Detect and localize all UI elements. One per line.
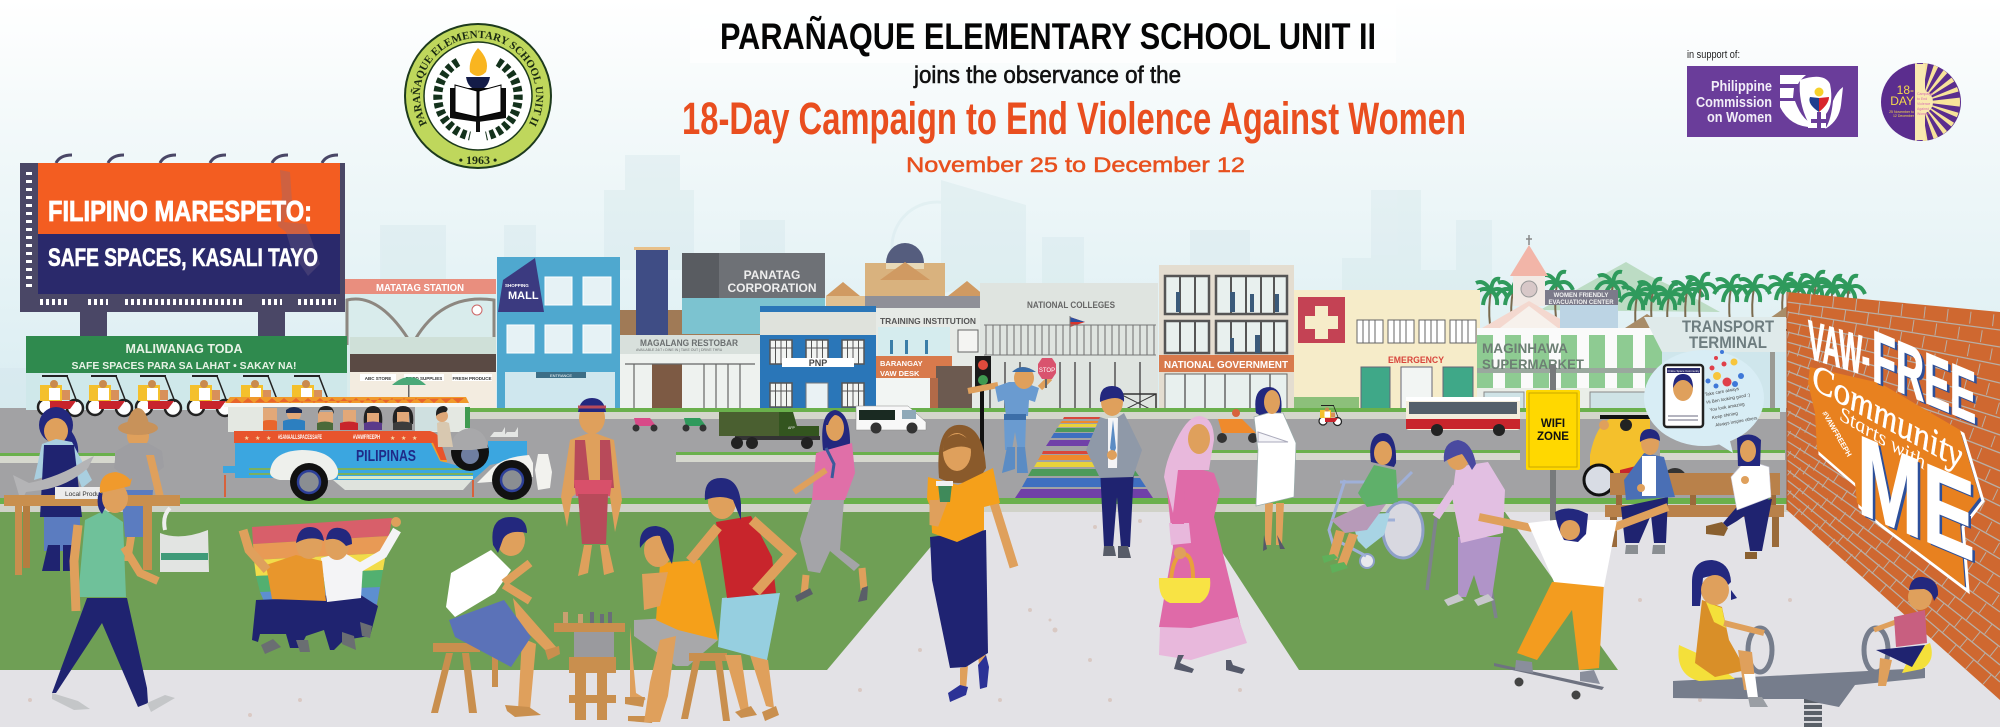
title: PARAÑAQUE ELEMENTARY SCHOOL UNIT II: [720, 15, 1376, 57]
building: shopping mall: SHOPPING: [505, 283, 529, 288]
building: Matatag station: FRESH PRODUCE: [452, 376, 492, 381]
building: Panatag Corporation: CORPORATION: [727, 281, 817, 295]
Maliwanag TODA terminal: MALIWANAG TODA: [125, 342, 243, 356]
building: national colleges: NATIONAL COLLEGES: [1027, 300, 1115, 311]
building: Magalang Restobar: AVAILABLE 24/7 • DINE IN | TAKE OUT | DRIVE THRU: [636, 348, 723, 352]
couple under rainbow flag: [243, 517, 401, 654]
person: woman in wheelchair: [1322, 433, 1423, 573]
building: women friendly evacuation center: EVACUATION CENTER: [1548, 300, 1614, 306]
person: man on bench using phone: [1621, 429, 1675, 554]
billboard: SAFE SPACES, KASALI TAYO: [48, 244, 318, 272]
building: hospital emergency: [1294, 290, 1480, 412]
mural: VAW-free community starts with me: Community: [1812, 354, 1963, 480]
18-day campaign logo: to End: [1917, 97, 1927, 101]
building: transport terminal: TRANSPORT: [1682, 318, 1774, 336]
mural: VAW-free community starts with me: Starts with: [1840, 402, 1925, 476]
campaign heading: 18-Day Campaign to End Violence Against Women: [682, 93, 1466, 144]
hills and palm trees: [1474, 262, 1865, 330]
building: women friendly evacuation center: [1545, 290, 1618, 333]
in support of label: in support of:: [1687, 49, 1740, 61]
jeepney: ★: [401, 435, 406, 442]
Maliwanag TODA terminal: SAFE SPACES PARA SA LAHAT • SAKAY NA!: [72, 360, 296, 372]
jeepney: #SANAALLSPACESSAFE: [278, 434, 322, 441]
person: doctor in white coat: [1254, 387, 1296, 551]
building: training institution and barangay VAW desk: BARANGAY: [880, 359, 923, 368]
road base: [0, 408, 2000, 508]
WiFi zone sign: ZONE: [1537, 431, 1569, 443]
vehicle: motorbikes: [632, 406, 1342, 443]
WiFi zone sign: WIFI: [1541, 418, 1565, 430]
building: national colleges: [980, 283, 1158, 412]
person: man in red tank top with stool: [681, 478, 790, 721]
road curbs and hedges: [0, 408, 1785, 463]
building: women friendly evacuation center: WOMEN FRIENDLY: [1554, 293, 1608, 299]
jeepney: ★: [390, 435, 395, 442]
18-day campaign logo: Violence: [1917, 102, 1930, 106]
18-day campaign logo: [1881, 63, 1961, 141]
mural: VAW-free community starts with me: [1808, 309, 1983, 591]
building: Panatag Corporation: [682, 253, 825, 334]
building: hospital emergency: EMERGENCY: [1388, 355, 1445, 366]
jeepney: PILIPINAS: [356, 448, 416, 465]
rainbow flag: [252, 518, 392, 625]
social media speech bubble: You look amazing: [1709, 401, 1745, 412]
18-day campaign logo: 25 November to: [1889, 110, 1914, 114]
left lawn: [0, 512, 960, 670]
mural: VAW-free community starts with me: #VAWFREEPH: [1820, 410, 1854, 458]
Philippine Commission on Women logo: [1687, 66, 1858, 137]
vehicle: army truck: [719, 412, 820, 449]
building: Panatag Corporation: PANATAG: [744, 268, 800, 282]
person: woman in hijab with yellow bag: [1159, 416, 1247, 674]
building: Maginhawa supermarket: MAGINHAWA: [1482, 340, 1568, 356]
person: traffic police officer with stop sign: [968, 358, 1056, 473]
seesaw with children: [1673, 560, 1938, 727]
person: chess player in white shirt: [431, 517, 560, 717]
vehicle: army truck: AFP: [788, 426, 795, 430]
billboard: FILIPINO MARESPETO:: [48, 196, 312, 228]
vehicle: red bus: [1406, 397, 1520, 436]
person: woman in pink blouse walking: [794, 410, 868, 602]
person: Igorot man in traditional dress: [561, 398, 622, 576]
jeepney: ★: [255, 435, 260, 442]
school seal logo: • 1963 •: [459, 153, 497, 167]
building: shopping mall: ENTRANCE: [550, 373, 572, 378]
18-day campaign logo: DAY: [1890, 94, 1914, 108]
curb: [0, 504, 2000, 512]
building: Matatag station: ABC STORE: [365, 376, 391, 381]
building: PNP: PNP: [809, 358, 827, 368]
market table with local products sign and bag: Local Products: [65, 491, 109, 498]
jeepney: ★: [266, 435, 271, 442]
building: domed heritage hall: [826, 243, 985, 314]
building: training institution and barangay VAW desk: TRAINING INSTITUTION: [880, 316, 976, 326]
person: chess player in orange tank top: [625, 526, 718, 723]
18-day campaign logo: Campaign: [1917, 92, 1933, 96]
building: Maginhawa supermarket: SUPERMARKET: [1482, 356, 1584, 372]
building: Matatag station: [345, 279, 496, 412]
bench: [1605, 473, 1784, 547]
pavement speckles: [28, 519, 1792, 717]
jeepney: #VAWFREEPH: [353, 434, 380, 441]
building: Magalang Restobar: [620, 247, 760, 412]
building: national government: [1159, 265, 1294, 412]
social media speech bubble: [1644, 350, 1764, 453]
subtitle line: joins the observance of the: [913, 62, 1181, 89]
building: church: [1482, 235, 1576, 328]
hedge along curb: [0, 498, 2000, 504]
18-day campaign logo: 12 December: [1893, 114, 1915, 118]
traffic light: [975, 356, 991, 460]
person: traffic police officer with stop sign: STOP: [1039, 368, 1055, 374]
billboard: [20, 155, 345, 338]
social media speech bubble: Online Space Community: [1668, 369, 1700, 373]
school seal logo: [404, 23, 552, 169]
campaign dates: November 25 to December 12: [906, 153, 1245, 177]
person: skateboarder: [1479, 507, 1668, 700]
building: shopping mall: [497, 257, 620, 412]
18-day campaign logo: 18-: [1897, 83, 1914, 97]
Maliwanag TODA terminal: [26, 336, 347, 416]
jeepney: ★: [412, 435, 417, 442]
mural: VAW-free community starts with me: ME: [1860, 415, 1978, 589]
faint city skyline: [0, 155, 1492, 408]
building: national government: NATIONAL GOVERNMENT: [1164, 360, 1288, 371]
18-day campaign logo: Against: [1917, 107, 1929, 111]
brick wall: [1787, 292, 2000, 700]
building: Matatag station: FOOD SUPPLIES: [406, 376, 442, 381]
person: woman on bench using phone: [1706, 434, 1772, 559]
social media speech bubble: Take care always: [1704, 386, 1740, 397]
person: main woman with coffee cup: [927, 425, 1014, 702]
school seal logo: PARAÑAQUE ELEMENTARY SCHOOL UNIT II: [410, 30, 544, 127]
social media speech bubble: Always inspire others: [1715, 415, 1758, 428]
mural: VAW-free community starts with me: ME: [1857, 412, 1975, 586]
pavement: [0, 512, 2000, 727]
social media speech bubble: Keep shining: [1712, 411, 1739, 420]
18-day campaign logo: Women: [1917, 112, 1929, 116]
building: transport terminal: [1644, 317, 1786, 412]
vehicle: police van: [856, 406, 926, 434]
person: walking man with hard hat: [52, 472, 175, 712]
Philippine Commission on Women logo: Philippine: [1711, 79, 1772, 95]
building: Matatag station: MATATAG STATION: [376, 282, 464, 294]
rainbow pedestrian crossing: [1013, 417, 1155, 501]
white title backing: [690, 0, 1396, 63]
WiFi zone sign: [1526, 365, 1580, 555]
building: training institution and barangay VAW desk: [876, 308, 980, 412]
right lawn: [1196, 512, 1618, 670]
building: transport terminal: TERMINAL: [1689, 334, 1767, 352]
person: elderly woman with walking canes: [1427, 440, 1505, 618]
mural: VAW-free community starts with me: VAW-: [1808, 309, 1870, 389]
building: training institution and barangay VAW desk: VAW DESK: [880, 369, 920, 378]
building: Magalang Restobar: MAGALANG RESTOBAR: [640, 338, 738, 349]
Philippine Commission on Women logo: Commission: [1696, 95, 1772, 111]
sky background: [0, 0, 2000, 420]
building: Maginhawa supermarket: [1477, 328, 1662, 412]
jeepney: [223, 397, 552, 501]
building: PNP: [760, 306, 876, 412]
person: farmer with straw hat: [114, 408, 166, 561]
person: man in grey suit: [1086, 386, 1142, 558]
building: shopping mall: MALL: [508, 290, 539, 302]
chess table with chess set: [554, 612, 625, 720]
market table with local products sign and bag: [4, 487, 209, 575]
person: fish vendor: [13, 407, 94, 571]
Philippine Commission on Women logo: on Women: [1707, 110, 1772, 126]
tricycle behind bench: [1584, 415, 1687, 495]
social media speech bubble: Hi Ben looking good :): [1706, 392, 1751, 405]
jeepney: ★: [244, 435, 249, 442]
